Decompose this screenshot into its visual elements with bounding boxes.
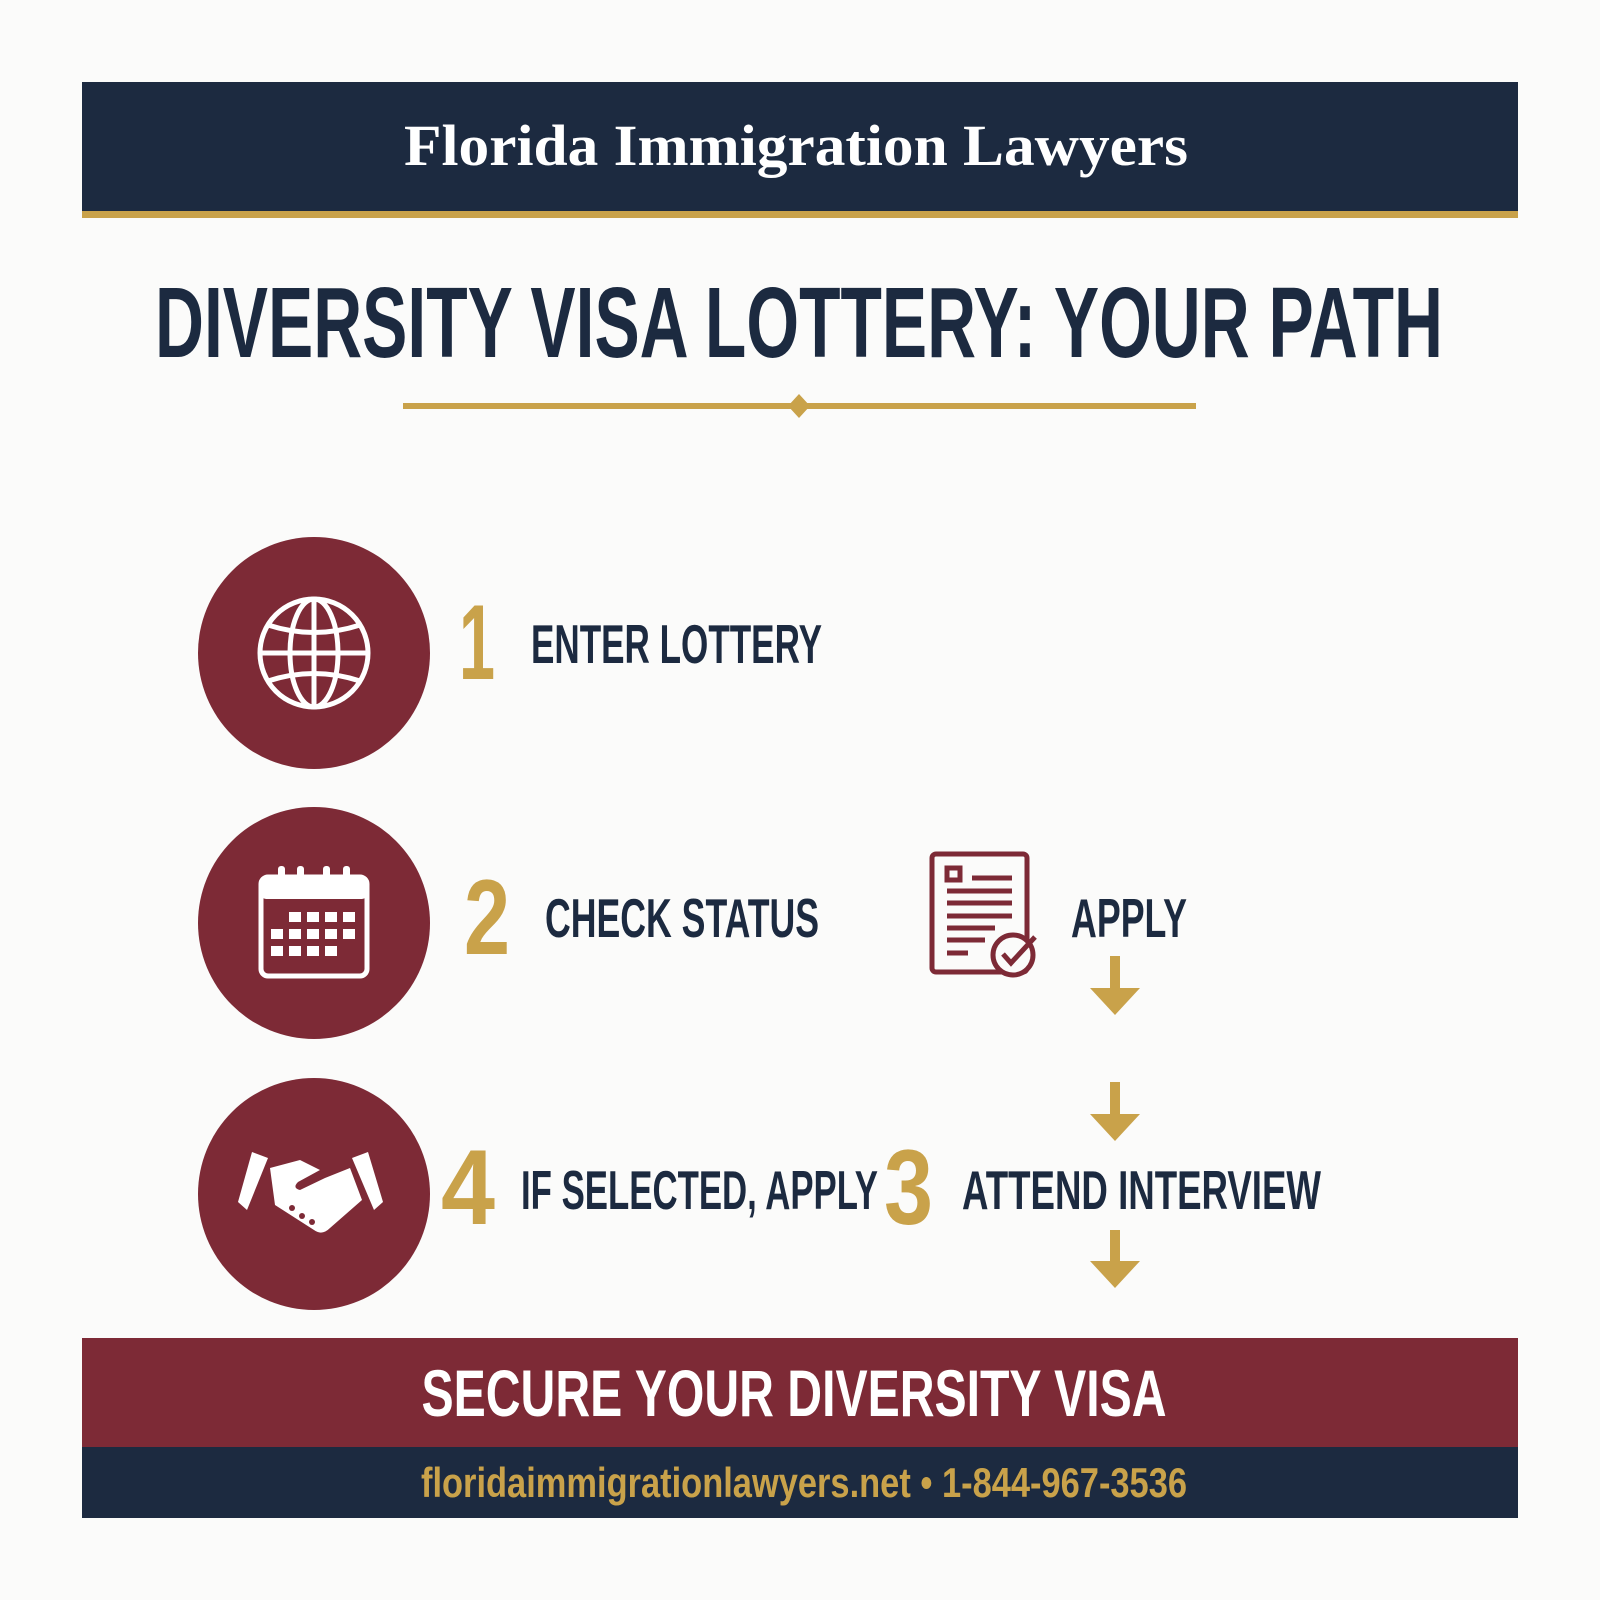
header bar xyxy=(82,82,1518,218)
apply label: APPLY xyxy=(1071,887,1187,949)
step 3 number: 3 xyxy=(884,1127,933,1247)
step 1 number: 1 xyxy=(459,582,495,702)
arrow 1 xyxy=(1090,956,1140,1015)
footer contact bar xyxy=(82,1447,1518,1518)
title divider xyxy=(403,394,1196,418)
step 3 label: ATTEND INTERVIEW xyxy=(962,1159,1321,1221)
step 4 circle: handshake xyxy=(198,1078,430,1310)
step 2 label: CHECK STATUS xyxy=(545,887,819,949)
footer contact bar: floridaimmigrationlawyers.net • 1-844-967-3536 xyxy=(421,1459,1187,1506)
step 1 circle: globe xyxy=(198,537,430,769)
step 1 label: ENTER LOTTERY xyxy=(531,613,822,675)
header text: Florida Immigration Lawyers xyxy=(404,113,1188,178)
arrow 2 xyxy=(1090,1082,1140,1141)
step 2 circle: calendar xyxy=(198,807,430,1039)
step 2 number: 2 xyxy=(464,857,510,977)
arrow 3 xyxy=(1090,1230,1140,1288)
step 4 number: 4 xyxy=(441,1127,495,1247)
footer call to action band xyxy=(82,1338,1518,1447)
icon: application document xyxy=(932,854,1035,975)
footer call to action band: SECURE YOUR DIVERSITY VISA xyxy=(422,1356,1166,1430)
step 4 label: IF SELECTED, APPLY xyxy=(521,1159,878,1221)
